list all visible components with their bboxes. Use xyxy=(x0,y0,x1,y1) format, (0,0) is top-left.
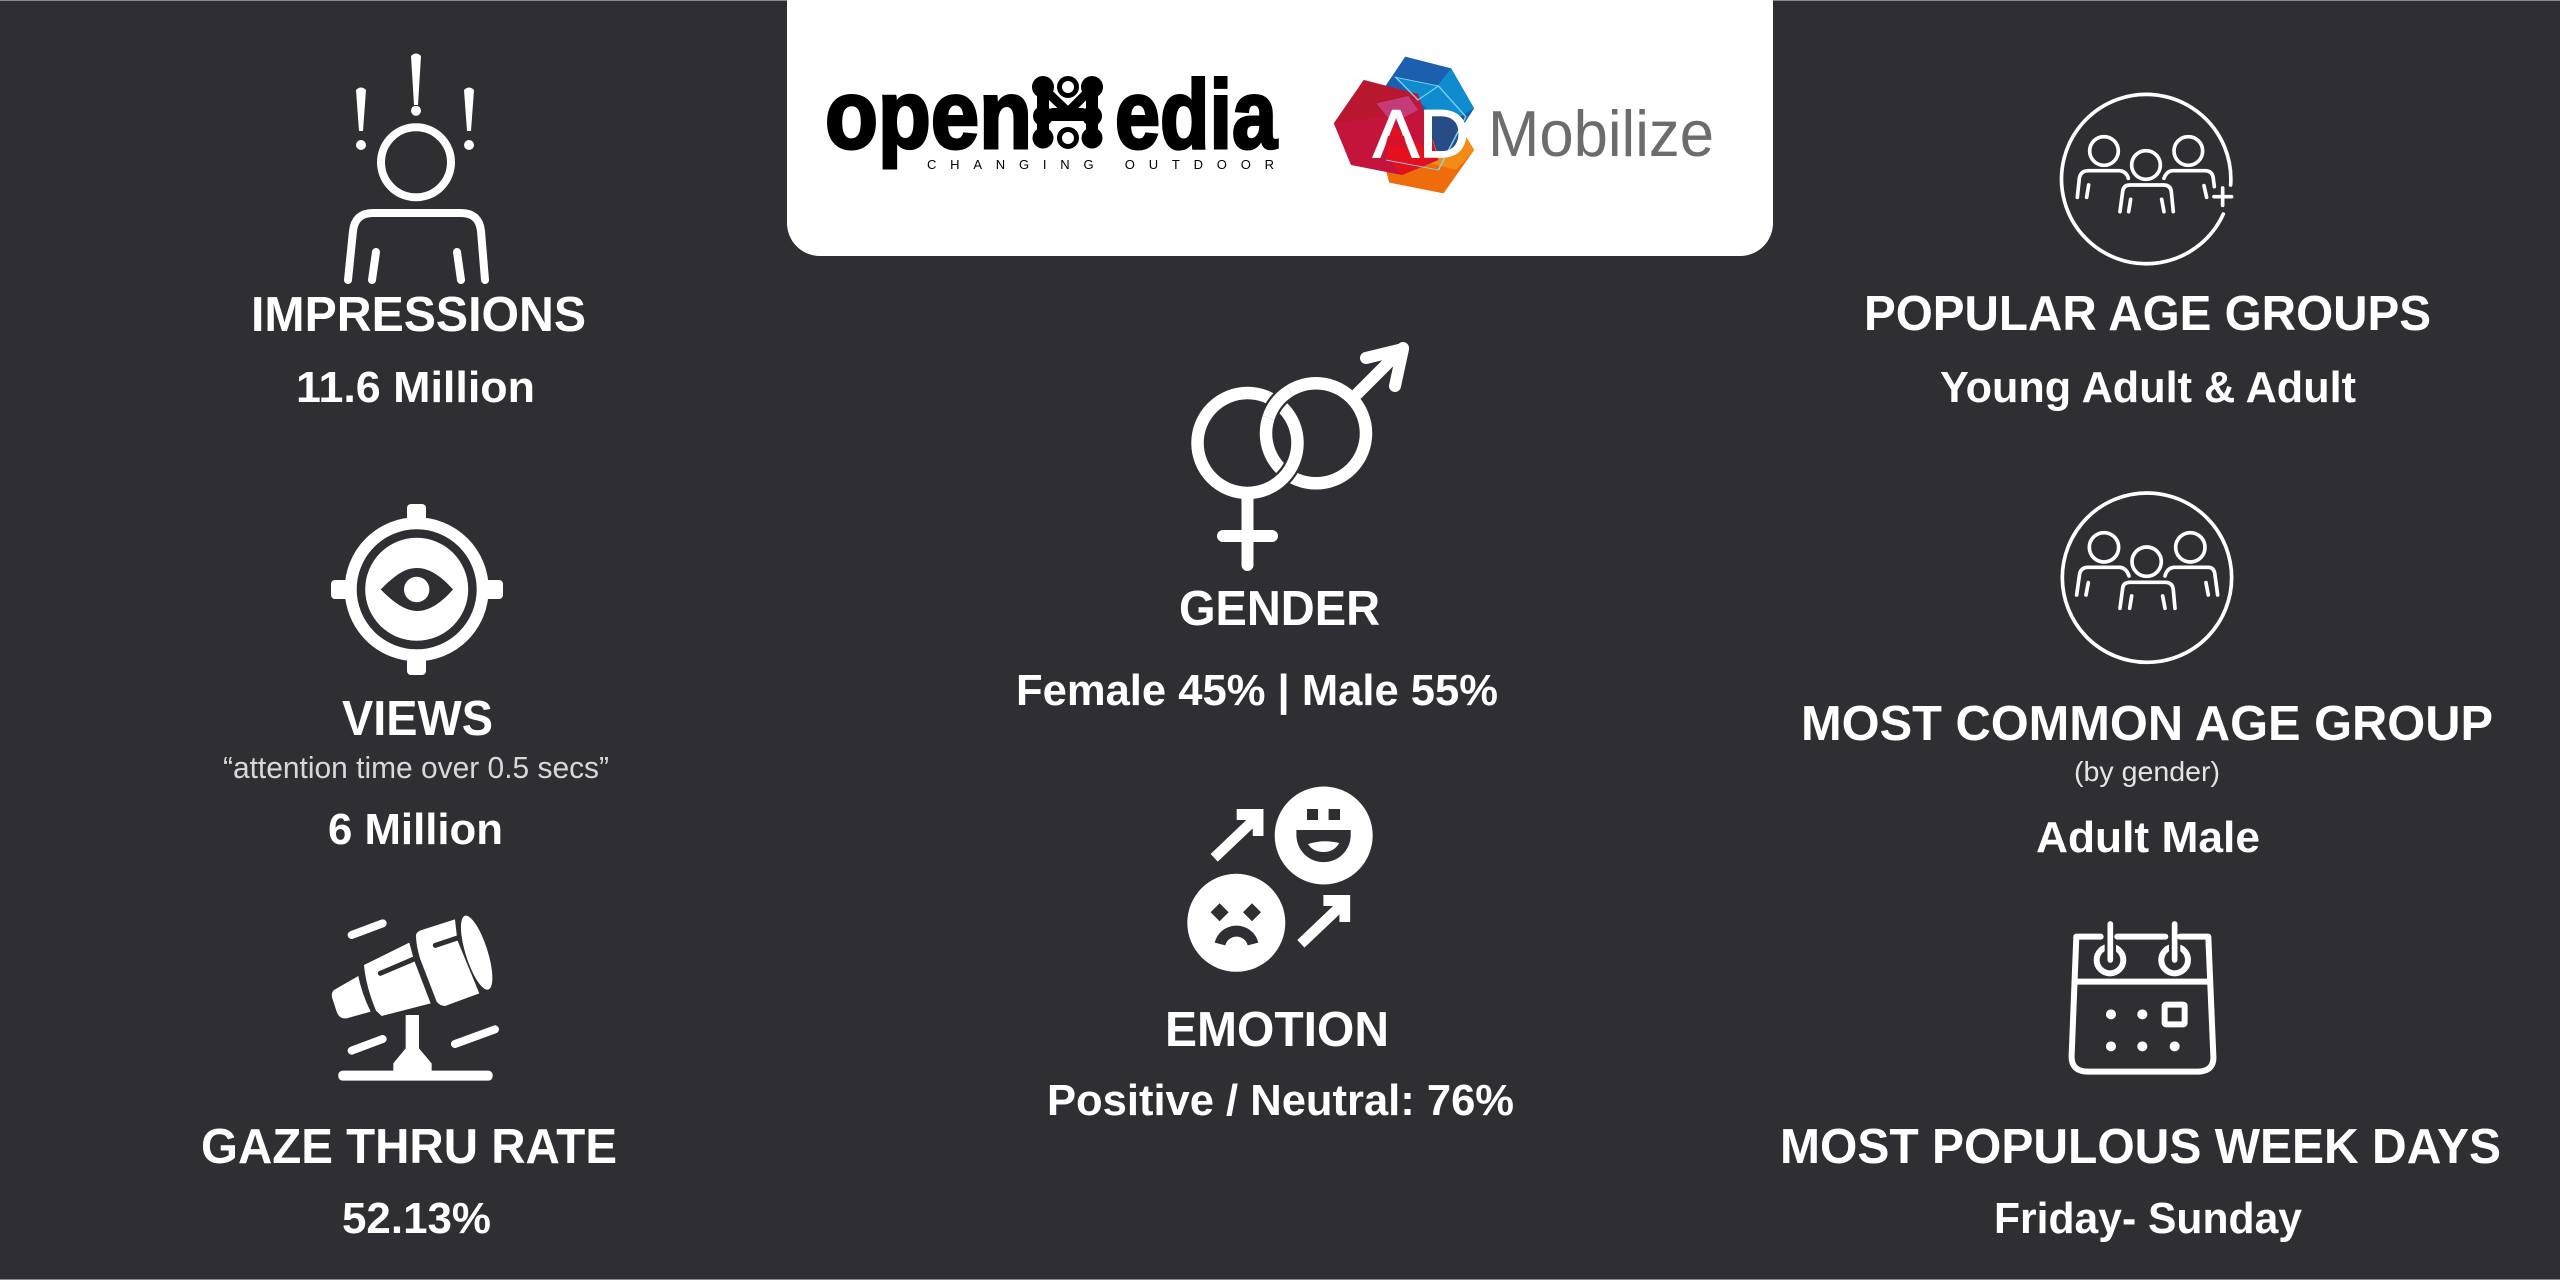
panel: emotion xyxy=(1047,786,1514,1125)
heading: popular age groups: POPULAR AGE GROUPS xyxy=(1864,287,2431,341)
note: by gender: (by gender) xyxy=(2074,756,2220,787)
icon: group with plus xyxy=(2062,94,2232,264)
icon: telescope xyxy=(332,912,499,1081)
logo: openMedia: edia xyxy=(1115,60,1278,169)
icon: calendar xyxy=(2072,924,2213,1072)
arrow: up right 1 xyxy=(1211,809,1263,862)
sad face xyxy=(1187,874,1285,972)
logo: openMedia: CHANGING OUTDOOR xyxy=(927,157,1274,172)
panel: most common age group xyxy=(1801,493,2493,862)
icon: group in circle xyxy=(2062,493,2232,662)
panel: gaze thru rate xyxy=(201,912,617,1243)
icon: emotion faces and arrows xyxy=(1187,786,1373,972)
value: popular age groups: Young Adult & Adult xyxy=(1940,364,2356,412)
value: impressions: 11.6 Million xyxy=(296,364,535,412)
note: attention time: “attention time over 0.5 secs” xyxy=(223,750,609,785)
heading: impressions: IMPRESSIONS xyxy=(251,288,586,342)
value: gaze thru rate: 52.13% xyxy=(342,1195,491,1243)
logo: AD Mobilize xyxy=(1334,57,1714,193)
panel: popular age groups xyxy=(1864,94,2431,412)
heading: emotion: EMOTION xyxy=(1165,1003,1389,1057)
value: emotion: Positive / Neutral: 76% xyxy=(1047,1077,1514,1125)
icon: target eye xyxy=(331,504,503,675)
value: views: 6 Million xyxy=(328,806,503,854)
heading: gaze thru rate: GAZE THRU RATE xyxy=(201,1120,617,1174)
icon: gender symbols xyxy=(1198,348,1403,565)
logo: openMedia xyxy=(825,60,1278,172)
heading: views: VIEWS xyxy=(342,692,493,746)
value: gender split: Female 45% | Male 55% xyxy=(1016,667,1498,716)
header logo card xyxy=(787,0,1773,256)
panel: most populous week days xyxy=(1780,924,2501,1243)
happy face xyxy=(1275,786,1373,884)
panel: impressions xyxy=(251,54,586,412)
arrow: up right 2 xyxy=(1297,895,1350,948)
icon: person with exclamation marks xyxy=(348,54,485,280)
value: most common age group: Adult Male xyxy=(2036,814,2260,862)
heading: most common age group: MOST COMMON AGE GROUP xyxy=(1801,697,2493,751)
panel: views xyxy=(223,504,609,854)
logo: AD Mobilize: Mobilize xyxy=(1488,97,1714,170)
logo: openMedia: open xyxy=(825,60,1032,169)
logo mark: dotted M xyxy=(1032,76,1103,148)
value: most populous week days: Friday- Sunday xyxy=(1994,1195,2302,1243)
heading: most populous week days: MOST POPULOUS WEEK DAYS xyxy=(1780,1120,2501,1174)
logo: AD Mobilize: AD xyxy=(1373,96,1469,172)
panel: gender xyxy=(1016,348,1498,716)
heading: gender: GENDER xyxy=(1179,582,1380,636)
